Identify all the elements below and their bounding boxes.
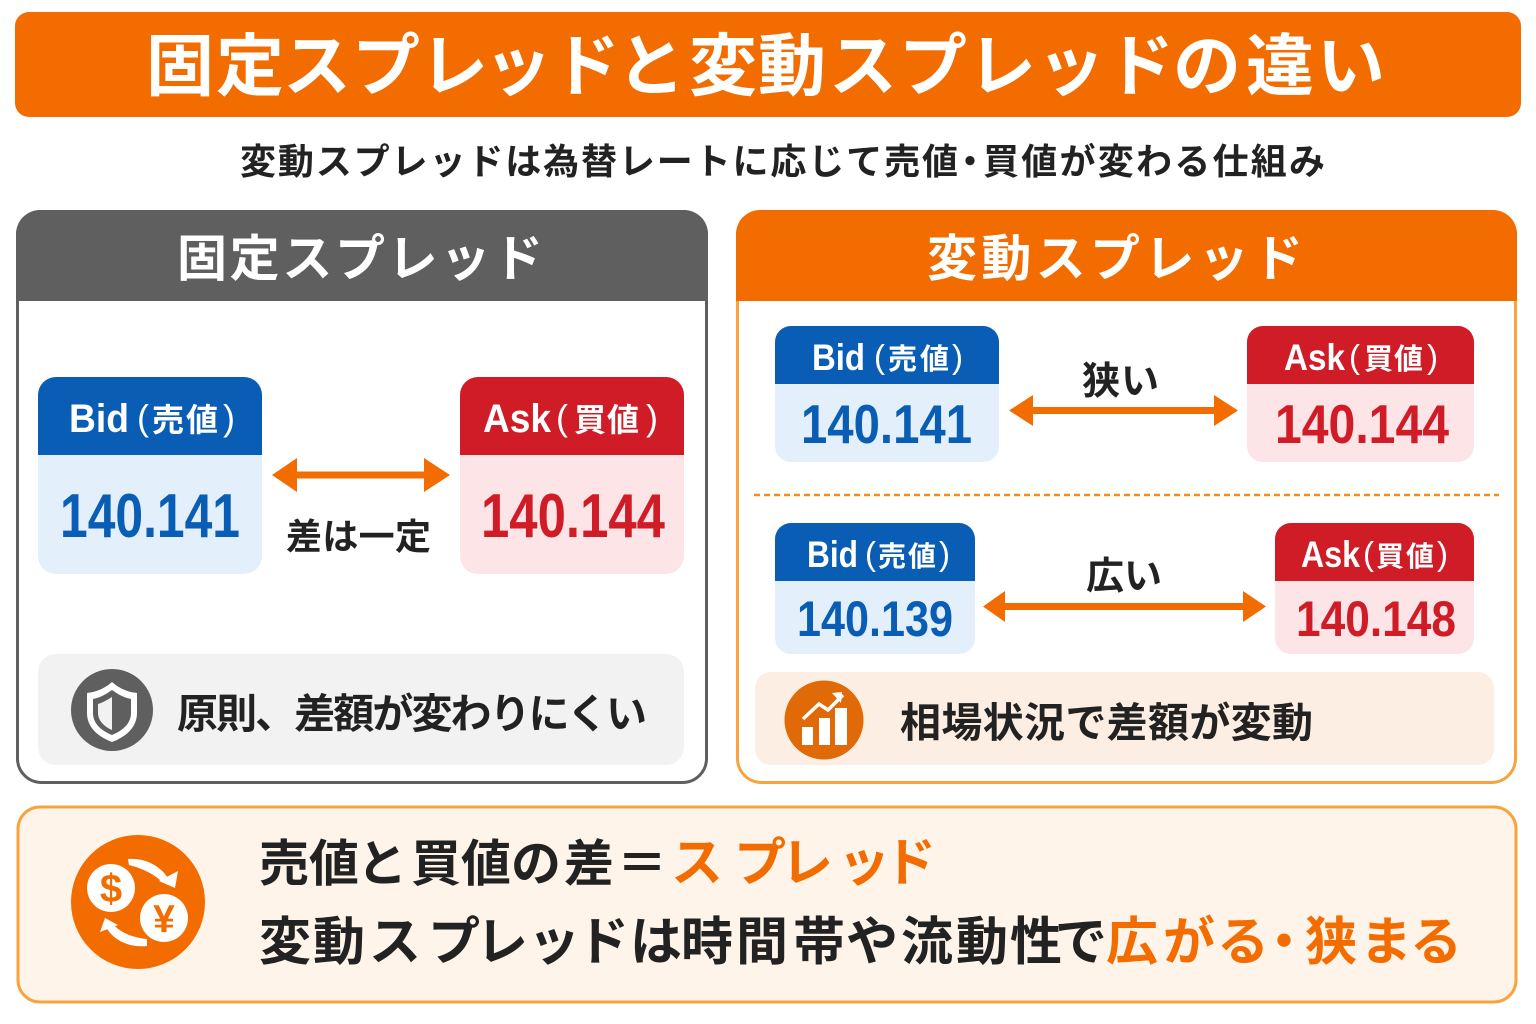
ask card: wide: ) — [1437, 535, 1448, 572]
subtitle: 買値が変わる仕組み — [983, 133, 1325, 185]
panel header: fixed spread: 固定スプレッド — [177, 219, 543, 291]
ask card: narrow: ) — [1427, 338, 1438, 375]
summary line 2: 変動スプレッドは時間帯や流動性で — [259, 900, 1107, 975]
subtitle: ・ — [952, 133, 988, 185]
bid card: narrow: Bid — [812, 337, 865, 378]
bid card: narrow: 140.141 — [801, 393, 972, 455]
ask card: narrow: 買値 — [1364, 336, 1423, 378]
summary line 1: 売値と買値の差＝ — [259, 824, 667, 896]
ask card: wide — [1275, 523, 1474, 654]
note: variable spread — [755, 672, 1494, 765]
summary panel — [18, 807, 1516, 1002]
icon: currency exchange — [71, 835, 205, 969]
ask card: wide: ( — [1363, 535, 1374, 572]
panel: fixed spread — [16, 210, 708, 782]
subtitle: 変動スプレッドは為替レートに応じて売値 — [240, 133, 958, 185]
bid card: 売値 — [152, 395, 218, 441]
ask card: wide: Ask — [1301, 534, 1360, 575]
note: fixed spread — [38, 654, 684, 765]
summary line 2: 広がる・狭まる — [1106, 900, 1462, 975]
summary line 1 — [259, 821, 936, 896]
icon: chart — [784, 680, 864, 760]
summary line 1: スプレッド — [671, 821, 936, 896]
label: narrow: 狭い — [1082, 350, 1159, 405]
divider — [754, 494, 1499, 496]
bid card: wide — [775, 523, 975, 654]
ask card: 買値 — [574, 395, 639, 441]
ask card: narrow — [1247, 326, 1474, 462]
note: fixed spread: 原則、差額が変わりにくい — [177, 680, 647, 740]
icon: currency exchange: ¥ — [153, 898, 175, 941]
bid card: wide: 140.139 — [797, 591, 953, 647]
ask card: Ask — [483, 397, 552, 441]
bid card: 140.141 — [60, 482, 240, 551]
bid card: ( — [137, 397, 149, 438]
ask card: narrow: ( — [1349, 338, 1360, 375]
ask card: ) — [646, 397, 658, 438]
ask card: narrow: Ask — [1284, 337, 1345, 378]
bid card: wide: ( — [865, 535, 876, 572]
bid card: narrow: ( — [874, 338, 885, 375]
bid card: narrow: 売値 — [888, 336, 949, 378]
arrow: narrow — [1009, 395, 1238, 426]
label: constant difference: 差は一定 — [286, 508, 431, 560]
arrow: wide — [983, 591, 1266, 622]
bid card: narrow: ) — [952, 338, 963, 375]
ask card: narrow: 140.144 — [1275, 393, 1449, 455]
icon: shield — [71, 669, 153, 751]
subtitle — [240, 133, 1325, 185]
panel header: variable spread: 変動スプレッド — [927, 219, 1303, 291]
title banner: 固定スプレッドと変動スプレッドの違い — [146, 11, 1385, 110]
panel: variable spread — [736, 210, 1517, 782]
ask card: wide: 買値 — [1376, 535, 1434, 575]
arrow: constant difference — [272, 458, 450, 492]
bid card — [38, 377, 262, 574]
bid card: ) — [223, 397, 235, 438]
ask card: 140.144 — [481, 482, 665, 551]
ask card: wide: 140.148 — [1296, 591, 1456, 647]
bid card: wide: ) — [939, 535, 950, 572]
bid card: wide: 売値 — [878, 535, 936, 575]
ask card: ( — [556, 397, 568, 438]
panel header: variable spread — [736, 210, 1517, 301]
ask card — [460, 377, 684, 574]
bid card: narrow — [775, 326, 999, 462]
icon: currency exchange: $ — [100, 867, 122, 911]
bid card: Bid — [69, 397, 129, 441]
note: variable spread: 相場状況で差額が変動 — [900, 689, 1313, 749]
panel header: fixed spread — [16, 210, 708, 301]
bid card: wide: Bid — [807, 534, 858, 575]
label: wide: 広い — [1086, 545, 1162, 600]
